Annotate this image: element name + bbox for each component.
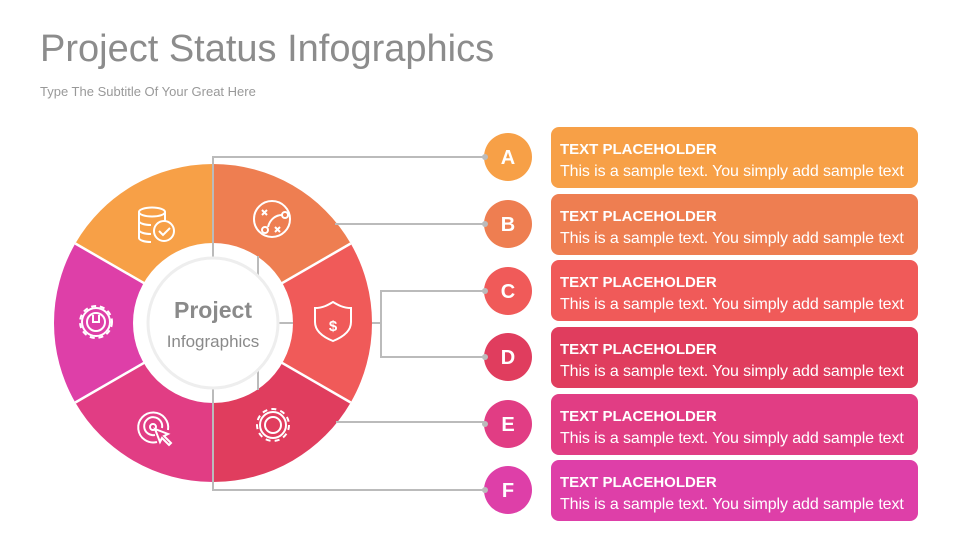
icon: strategy [254,201,290,237]
title: Project Status Infographics [40,28,494,70]
box F: TEXT PLACEHOLDER [560,474,717,491]
center label [148,258,278,388]
markers A-F: D [501,347,515,369]
box E: TEXT PLACEHOLDER [560,408,717,425]
icon: shield dollar [315,302,351,341]
box C [551,260,918,321]
box E [551,394,918,455]
box D [551,327,918,388]
box A: This is a sample text. You simply add sample text [560,163,904,180]
segment D [213,323,351,482]
markers A-F: F [502,480,514,502]
box E: This is a sample text. You simply add sample text [560,430,904,447]
icon: shield dollar: $ [329,318,338,335]
icon: target cursor [138,412,171,445]
box D: This is a sample text. You simply add sample text [560,363,904,380]
icon: database check [139,208,174,242]
box B: This is a sample text. You simply add sample text [560,230,904,247]
box A [551,127,918,188]
markers A-F: B [501,214,515,236]
subtitle: Type The Subtitle Of Your Great Here [40,84,256,99]
segment A [75,164,213,323]
center label: Project [174,297,252,323]
box D: TEXT PLACEHOLDER [560,341,717,358]
markers A-F: C [501,281,515,303]
box C: This is a sample text. You simply add sample text [560,296,904,313]
segment E [75,323,213,482]
box A: TEXT PLACEHOLDER [560,141,717,158]
icon: gear wrench [80,306,112,338]
segment B [213,164,351,323]
segment C [213,244,372,402]
markers A-F: A [501,147,515,169]
icon: gear [257,409,289,441]
box B [551,194,918,255]
box B: TEXT PLACEHOLDER [560,208,717,225]
box C: TEXT PLACEHOLDER [560,274,717,291]
segment F [54,244,213,402]
center label: Infographics [167,332,259,351]
box F: This is a sample text. You simply add sample text [560,496,904,513]
markers A-F [484,133,532,514]
markers A-F: E [501,414,515,436]
box F [551,460,918,521]
